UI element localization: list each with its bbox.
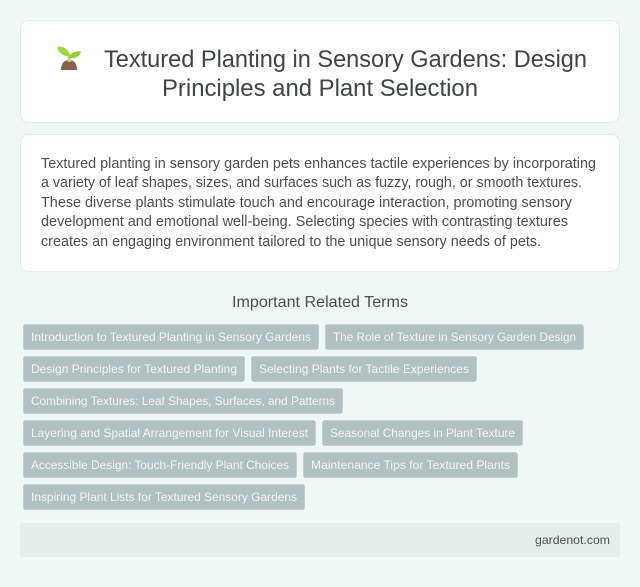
tag: inspiring plant lists bbox=[24, 484, 304, 510]
footer bar bbox=[20, 523, 620, 557]
tag: selecting plants bbox=[252, 356, 476, 382]
tag: role of texture bbox=[326, 324, 584, 350]
tag: combining textures: Combining Textures: Leaf Shapes, Surfaces, and Patterns bbox=[31, 395, 335, 408]
text block: description paragraph: These diverse plants stimulate touch and encourage interaction, promoting sensory bbox=[41, 195, 573, 211]
tag: role of texture: The Role of Texture in Sensory Garden Design bbox=[333, 331, 576, 344]
text block: description paragraph: a variety of leaf shapes, sizes, and surfaces such as fuzzy, rough, or smooth textures. bbox=[41, 175, 582, 191]
text block: description paragraph: creates an engaging environment tailored to the unique sensory needs of pets. bbox=[41, 234, 541, 250]
tag: accessible design: Accessible Design: Touch-Friendly Plant Choices bbox=[31, 459, 289, 472]
text block: description paragraph: Textured planting in sensory garden pets enhances tactile experiences by incorporating bbox=[41, 156, 596, 172]
title: Principles and Plant Selection bbox=[162, 75, 478, 102]
tag: design principles bbox=[24, 356, 244, 382]
text block: description paragraph bbox=[41, 156, 596, 250]
tag: maintenance tips: Maintenance Tips for Textured Plants bbox=[311, 459, 510, 472]
tag: introduction bbox=[24, 324, 318, 350]
icon: seedling bbox=[58, 46, 81, 70]
title bbox=[104, 46, 587, 102]
heading: important related terms: Important Related Terms bbox=[232, 294, 408, 311]
tag: accessible design bbox=[24, 452, 296, 478]
tag: layering: Layering and Spatial Arrangement for Visual Interest bbox=[31, 427, 309, 440]
panel: title card bbox=[20, 20, 620, 122]
tag: selecting plants: Selecting Plants for Tactile Experiences bbox=[259, 363, 469, 376]
tag: seasonal changes: Seasonal Changes in Plant Texture bbox=[330, 427, 515, 440]
tag: design principles: Design Principles for Textured Planting bbox=[31, 363, 237, 376]
tag: seasonal changes bbox=[322, 420, 522, 446]
footer: site name: gardenot.com bbox=[535, 533, 610, 547]
tag: maintenance tips bbox=[304, 452, 518, 478]
tag: layering bbox=[24, 420, 316, 446]
tag list bbox=[24, 324, 584, 510]
tag: inspiring plant lists: Inspiring Plant Lists for Textured Sensory Gardens bbox=[31, 491, 297, 504]
title: Textured Planting in Sensory Gardens: Design bbox=[104, 46, 587, 73]
tag: combining textures bbox=[24, 388, 342, 414]
text block: description paragraph: development and emotional well-being. Selecting species with contrasting textures bbox=[41, 214, 568, 230]
panel: description bbox=[20, 134, 620, 272]
tag: introduction: Introduction to Textured Planting in Sensory Gardens bbox=[31, 331, 311, 344]
